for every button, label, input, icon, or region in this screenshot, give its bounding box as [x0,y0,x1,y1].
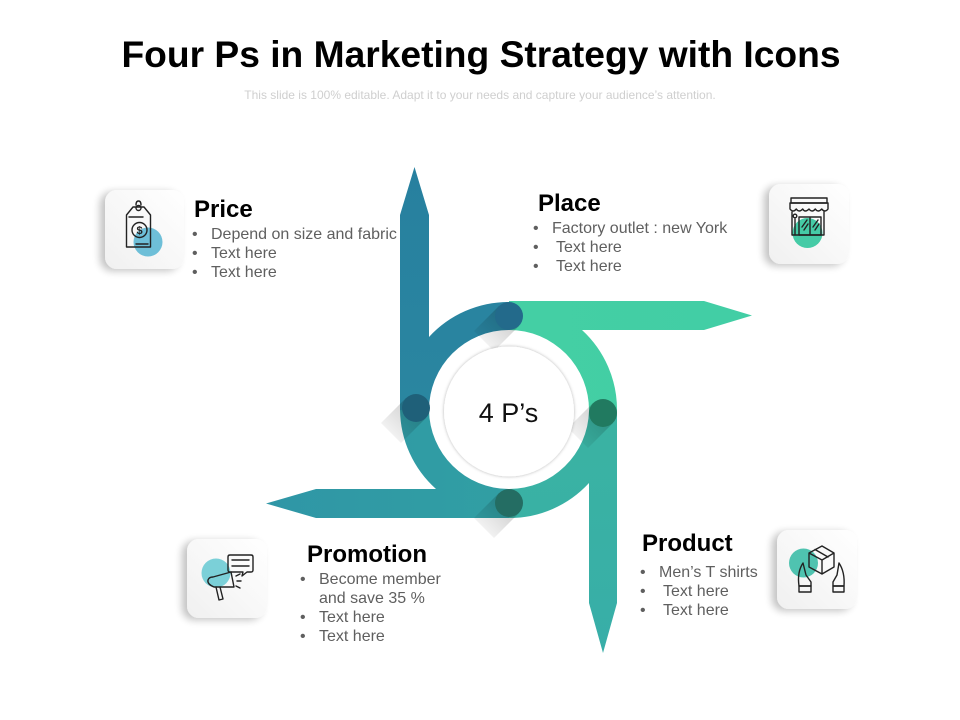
product bullets: • [640,583,646,600]
promotion bullets [300,571,441,645]
promotion bullets: Become member [319,571,441,588]
product bullets: Text here [663,583,729,600]
arrow: price [400,167,509,410]
place bullets: • [533,258,539,275]
price heading: Price [194,196,253,223]
product heading: Product [642,530,733,557]
panel: product [640,530,857,619]
arrow: promotion [266,410,509,518]
product icon card [777,530,857,609]
diagram: four arrows around central circle [266,167,752,653]
promotion bullets: • [300,628,306,645]
promotion bullets: Text here [319,628,385,645]
arrow: product [509,411,617,653]
joint dot: right [589,399,617,427]
price bullets: • [192,245,198,262]
place bullets: • [533,239,539,256]
panel: price [105,190,397,281]
shadow: bottom joint [474,493,519,538]
product bullets: • [640,602,646,619]
price bullets: • [192,264,198,281]
promotion icon card [187,539,267,618]
promotion heading: Promotion [307,541,427,568]
price icon card: $ [136,225,143,237]
shadow: right joint [568,403,613,448]
joint dot: top [495,302,523,330]
promotion bullets: Text here [319,609,385,626]
panel: place [533,184,849,275]
joint dot: bottom [495,489,523,517]
price bullets: Text here [211,264,277,281]
price bullets [192,226,397,281]
place icon card [769,184,849,264]
place bullets: Text here [556,258,622,275]
price bullets: Text here [211,245,277,262]
place bullets: • [533,220,539,237]
place bullets [533,220,728,275]
center label: 4 P’s [479,398,538,428]
subtitle: This slide is 100% editable. Adapt it to your needs and capture your audience’s attention. [244,88,716,102]
place bullets: Factory outlet : new York [552,220,728,237]
joint dot: left [402,394,430,422]
promotion bullets: • [300,609,306,626]
arrow: place [509,301,752,411]
product bullets [640,564,758,619]
product bullets: Men’s T shirts [659,564,758,581]
place heading: Place [538,190,601,217]
shadow: left joint [381,398,426,443]
promotion bullets: and save 35 % [319,590,425,607]
promotion bullets: • [300,571,306,588]
product bullets: Text here [663,602,729,619]
price bullets: • [192,226,198,243]
price icon card [105,190,184,269]
center circle [444,346,574,476]
title: Four Ps in Marketing Strategy with Icons [121,33,841,75]
place bullets: Text here [556,239,622,256]
panel: promotion [187,539,441,645]
price bullets: Depend on size and fabric [211,226,397,243]
product bullets: • [640,564,646,581]
shadow: top joint [474,306,519,351]
